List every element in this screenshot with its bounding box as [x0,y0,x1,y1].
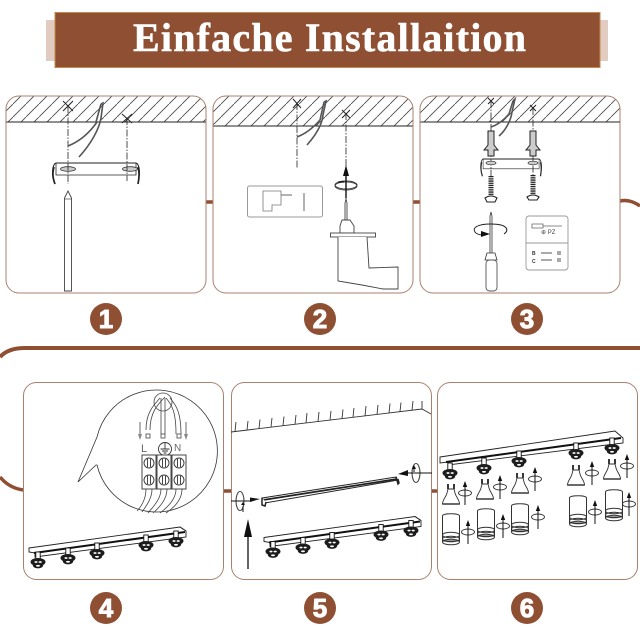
bulbs [442,459,620,504]
up arrow [247,535,249,569]
right ring and arrow [398,464,432,482]
left ring and arrow [231,492,260,512]
pencil [64,191,72,291]
badge 3 [511,303,543,335]
screws [491,175,533,198]
ceiling hatch [6,96,206,122]
shades [442,490,622,545]
bracket [481,159,541,176]
badge 6 [511,592,543,624]
shade arrows [462,492,636,544]
badge 5 [304,592,336,624]
ceiling line [231,401,431,432]
guide lines [297,103,346,200]
panel 3: screw bracket: ⊕ PZ [541,230,556,236]
guide lines and marks [68,106,127,184]
badge 1 [90,303,122,335]
wall plugs [484,131,540,156]
panel 6: bulbs [438,382,638,580]
terminal block [142,455,186,489]
title banner [46,12,608,68]
badge 2: 2 [313,304,327,334]
panel 2: drill [213,96,413,293]
badge 1: 1 [99,304,113,334]
panel 4: wiring: N [174,443,181,454]
screwdriver [490,212,492,253]
drill info box [248,186,322,217]
tool box [526,216,568,270]
badge 5: 5 [313,593,327,623]
light rail [264,516,421,558]
wiring [140,393,186,438]
bulb arrows [458,454,634,505]
badge 4 [90,592,122,624]
bracket bar [262,477,399,506]
output wires [137,489,182,513]
wires [68,103,103,157]
panel 3: screw bracket: C [532,259,536,265]
connector lines [0,201,640,491]
badge 2 [304,303,336,335]
guides [491,101,533,178]
badge 4: 4 [99,593,114,623]
ceiling hatch [213,96,413,126]
light rail [440,431,623,479]
ceiling hatch [420,96,620,122]
light rail [29,527,186,568]
labels: L [141,443,147,455]
badge 6: 6 [520,593,534,623]
wires [297,101,326,145]
panel 3: screw bracket: B [532,251,536,257]
callout bubble [78,390,217,512]
drill [330,199,398,289]
panel 1: mark holes [6,96,206,293]
arrow and rotation [335,181,357,189]
title: Einfache Installaition [133,15,526,60]
panel 4: wiring [24,382,224,580]
panel 5: mount [231,382,432,580]
badge 3: 3 [520,304,534,334]
rotation [474,224,507,235]
wires [491,99,515,136]
panel 3: screw bracket [420,96,620,293]
bracket [53,163,139,184]
